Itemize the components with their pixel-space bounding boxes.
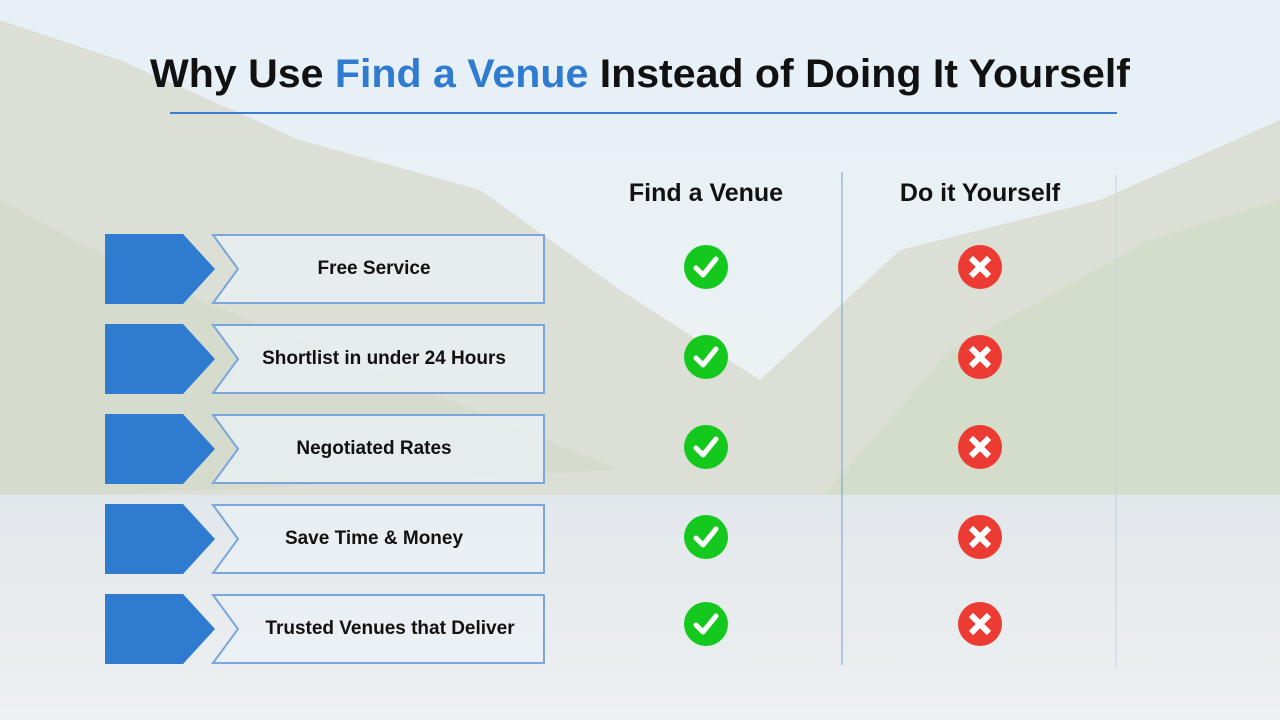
- row 2: [105, 324, 1002, 394]
- row 2: Shortlist in under 24 Hours: [262, 348, 506, 369]
- title: Why Use Find a Venue Instead of Doing It Yourself: [150, 52, 1131, 96]
- row 1: [105, 234, 1002, 304]
- column header: Find a Venue: Find a Venue: [629, 179, 783, 207]
- row 4: Save Time & Money: [285, 528, 463, 549]
- row 5: Trusted Venues that Deliver: [265, 618, 515, 639]
- column header: Do it Yourself: Do it Yourself: [900, 179, 1061, 207]
- row 3: [105, 414, 1002, 484]
- row 4: [105, 504, 1002, 574]
- row 3: Negotiated Rates: [296, 438, 452, 459]
- row 1: Free Service: [317, 258, 431, 279]
- row 5: [105, 594, 1002, 664]
